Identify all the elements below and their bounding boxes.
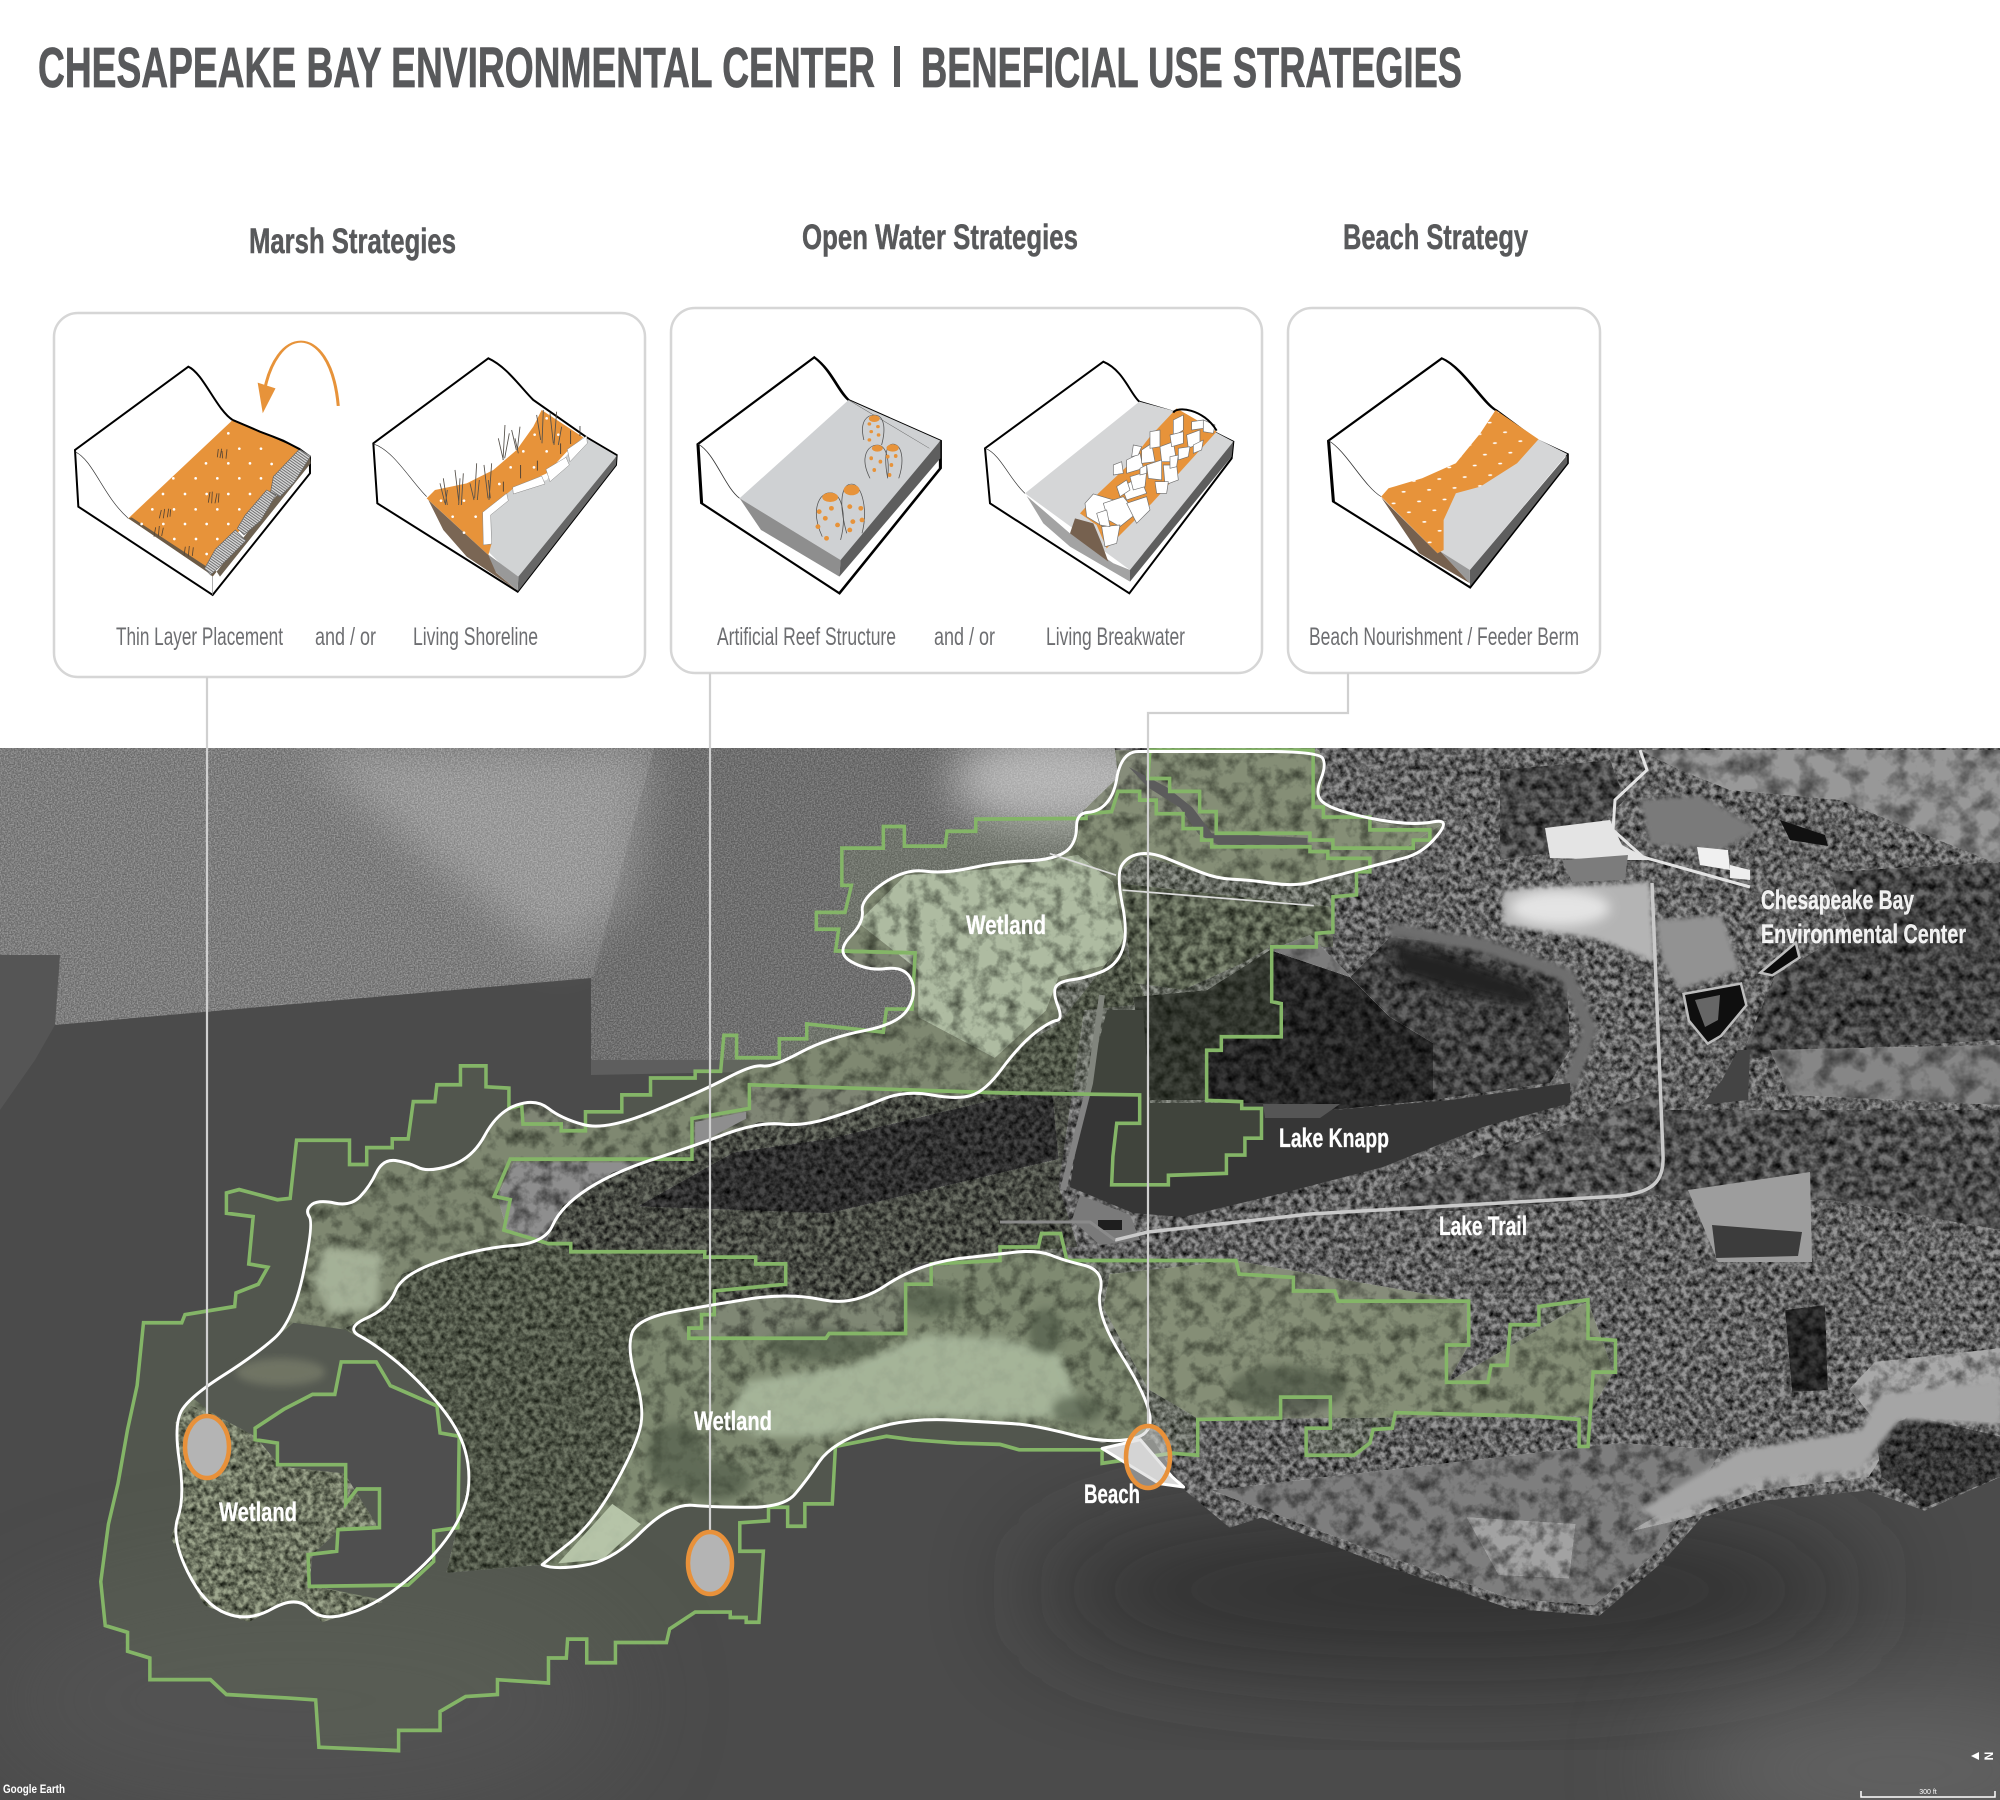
land: lower mid fields — [1212, 1443, 1722, 1605]
field east of wetland — [1103, 1261, 1614, 1419]
forest north of lake — [1117, 883, 1333, 990]
scale bar: 300 ft — [1919, 1789, 1937, 1796]
map credit: Google Earth — [3, 1782, 65, 1796]
parking and lawn — [1545, 820, 1650, 860]
map label: wetland north: Wetland — [966, 910, 1046, 940]
connector: open water to map — [709, 673, 711, 1535]
label: beach nourishment / feeder berm: Beach Nourishment / Feeder Berm — [1309, 623, 1579, 651]
wetland: main ring base — [176, 751, 1443, 1617]
map label: beach: Beach — [1084, 1479, 1140, 1509]
icon: living shoreline block — [373, 358, 617, 592]
white beach outline — [1102, 1440, 1184, 1487]
marker: open water site — [688, 1532, 732, 1594]
land: right upland — [1000, 748, 2000, 1615]
panel: marsh strategies — [54, 313, 645, 677]
river sliver — [1129, 767, 1307, 845]
marker: marsh site — [185, 1416, 229, 1478]
settling pond field — [1688, 1172, 1812, 1262]
reef domes — [816, 415, 902, 540]
south shoreline field — [1640, 1380, 2000, 1520]
field east lower — [1770, 1045, 2000, 1105]
title: BENEFICIAL USE STRATEGIES — [921, 36, 1462, 100]
forest: central woodland — [344, 943, 1148, 1573]
visitor station — [1072, 1195, 1140, 1245]
north arrow — [1971, 1752, 1996, 1760]
heading: beach strategy: Beach Strategy — [1343, 218, 1528, 257]
marker: beach site — [1126, 1426, 1170, 1488]
very dark forest band — [638, 1092, 1059, 1213]
wetland: north-east strip — [1077, 750, 1446, 885]
pale cleared ground — [1503, 882, 1655, 962]
upper wetland light area — [858, 855, 1124, 1058]
map label: lake knapp: Lake Knapp — [1279, 1123, 1389, 1153]
green bay edge — [835, 951, 915, 953]
connector: marsh to map — [206, 677, 208, 1420]
breakwater rocks — [1085, 415, 1215, 547]
forest south of lake — [1400, 1090, 1660, 1215]
icon: curved orange arrow — [258, 342, 338, 413]
wetland: south-west island — [171, 1406, 383, 1622]
trees north centre — [1500, 760, 1625, 860]
heading: marsh strategies: Marsh Strategies — [249, 222, 456, 261]
real-pixel details — [1000, 750, 2000, 1520]
centre ring — [1640, 795, 1760, 850]
label: living breakwater: Living Breakwater — [1046, 623, 1185, 651]
title: CHESAPEAKE BAY ENVIRONMENTAL CENTER — [38, 36, 875, 100]
fields north-east — [1640, 750, 2000, 865]
connector: beach to map — [1148, 673, 1348, 1430]
buildings — [1697, 847, 1730, 870]
forest east — [1740, 862, 2000, 1060]
heading: open water strategies: Open Water Strategies — [802, 218, 1078, 257]
road: lake trail — [1115, 883, 1663, 1240]
label: artificial reef structure: Artificial Reef Structure — [717, 623, 896, 651]
dark marsh — [1133, 950, 1433, 1110]
causeway — [1063, 995, 1102, 1190]
white wetland boundary: central south — [542, 1251, 1150, 1568]
scale bar — [1861, 1789, 1995, 1797]
map label: wetland south-west: Wetland — [219, 1497, 297, 1527]
green placement area: main — [101, 791, 1615, 1751]
dark blotches in central wetland — [647, 1286, 1103, 1501]
ponds — [1780, 820, 1828, 846]
grey patch outside placement area — [497, 1163, 690, 1244]
light patch in western wetland — [313, 1247, 383, 1315]
map label: chesapeake bay environmental center: Chesapeake Bay — [1761, 885, 1914, 915]
label: and / or: and / or — [315, 623, 376, 651]
icon: living breakwater block — [985, 362, 1233, 593]
label: and / or: and / or — [934, 623, 995, 651]
lawn field — [1655, 915, 1740, 990]
icon: beach nourishment block — [1329, 358, 1567, 587]
white wetland boundary: main — [176, 751, 1443, 1617]
panel: beach strategy — [1288, 308, 1600, 673]
wetland: central south — [542, 1251, 1150, 1568]
map label: wetland centre: Wetland — [694, 1406, 772, 1436]
aerial map — [0, 730, 2000, 1800]
land: south-east field — [1631, 1348, 2000, 1531]
north arrow: N — [1982, 1752, 1996, 1760]
bay inside south-west ring — [191, 1323, 471, 1600]
lake knapp — [1070, 1010, 1570, 1217]
panel: open water strategies — [671, 308, 1262, 673]
label: living shoreline: Living Shoreline — [413, 623, 538, 651]
water tones — [0, 730, 2000, 1800]
white trail across upper wetland — [1050, 854, 1314, 906]
icon: artificial reef block — [698, 357, 940, 593]
icon: thin layer placement block — [75, 367, 311, 595]
map label: lake trail: Lake Trail — [1439, 1211, 1527, 1241]
label: thin layer placement: Thin Layer Placement — [116, 623, 283, 651]
green placement area: north patch — [1148, 750, 1430, 848]
